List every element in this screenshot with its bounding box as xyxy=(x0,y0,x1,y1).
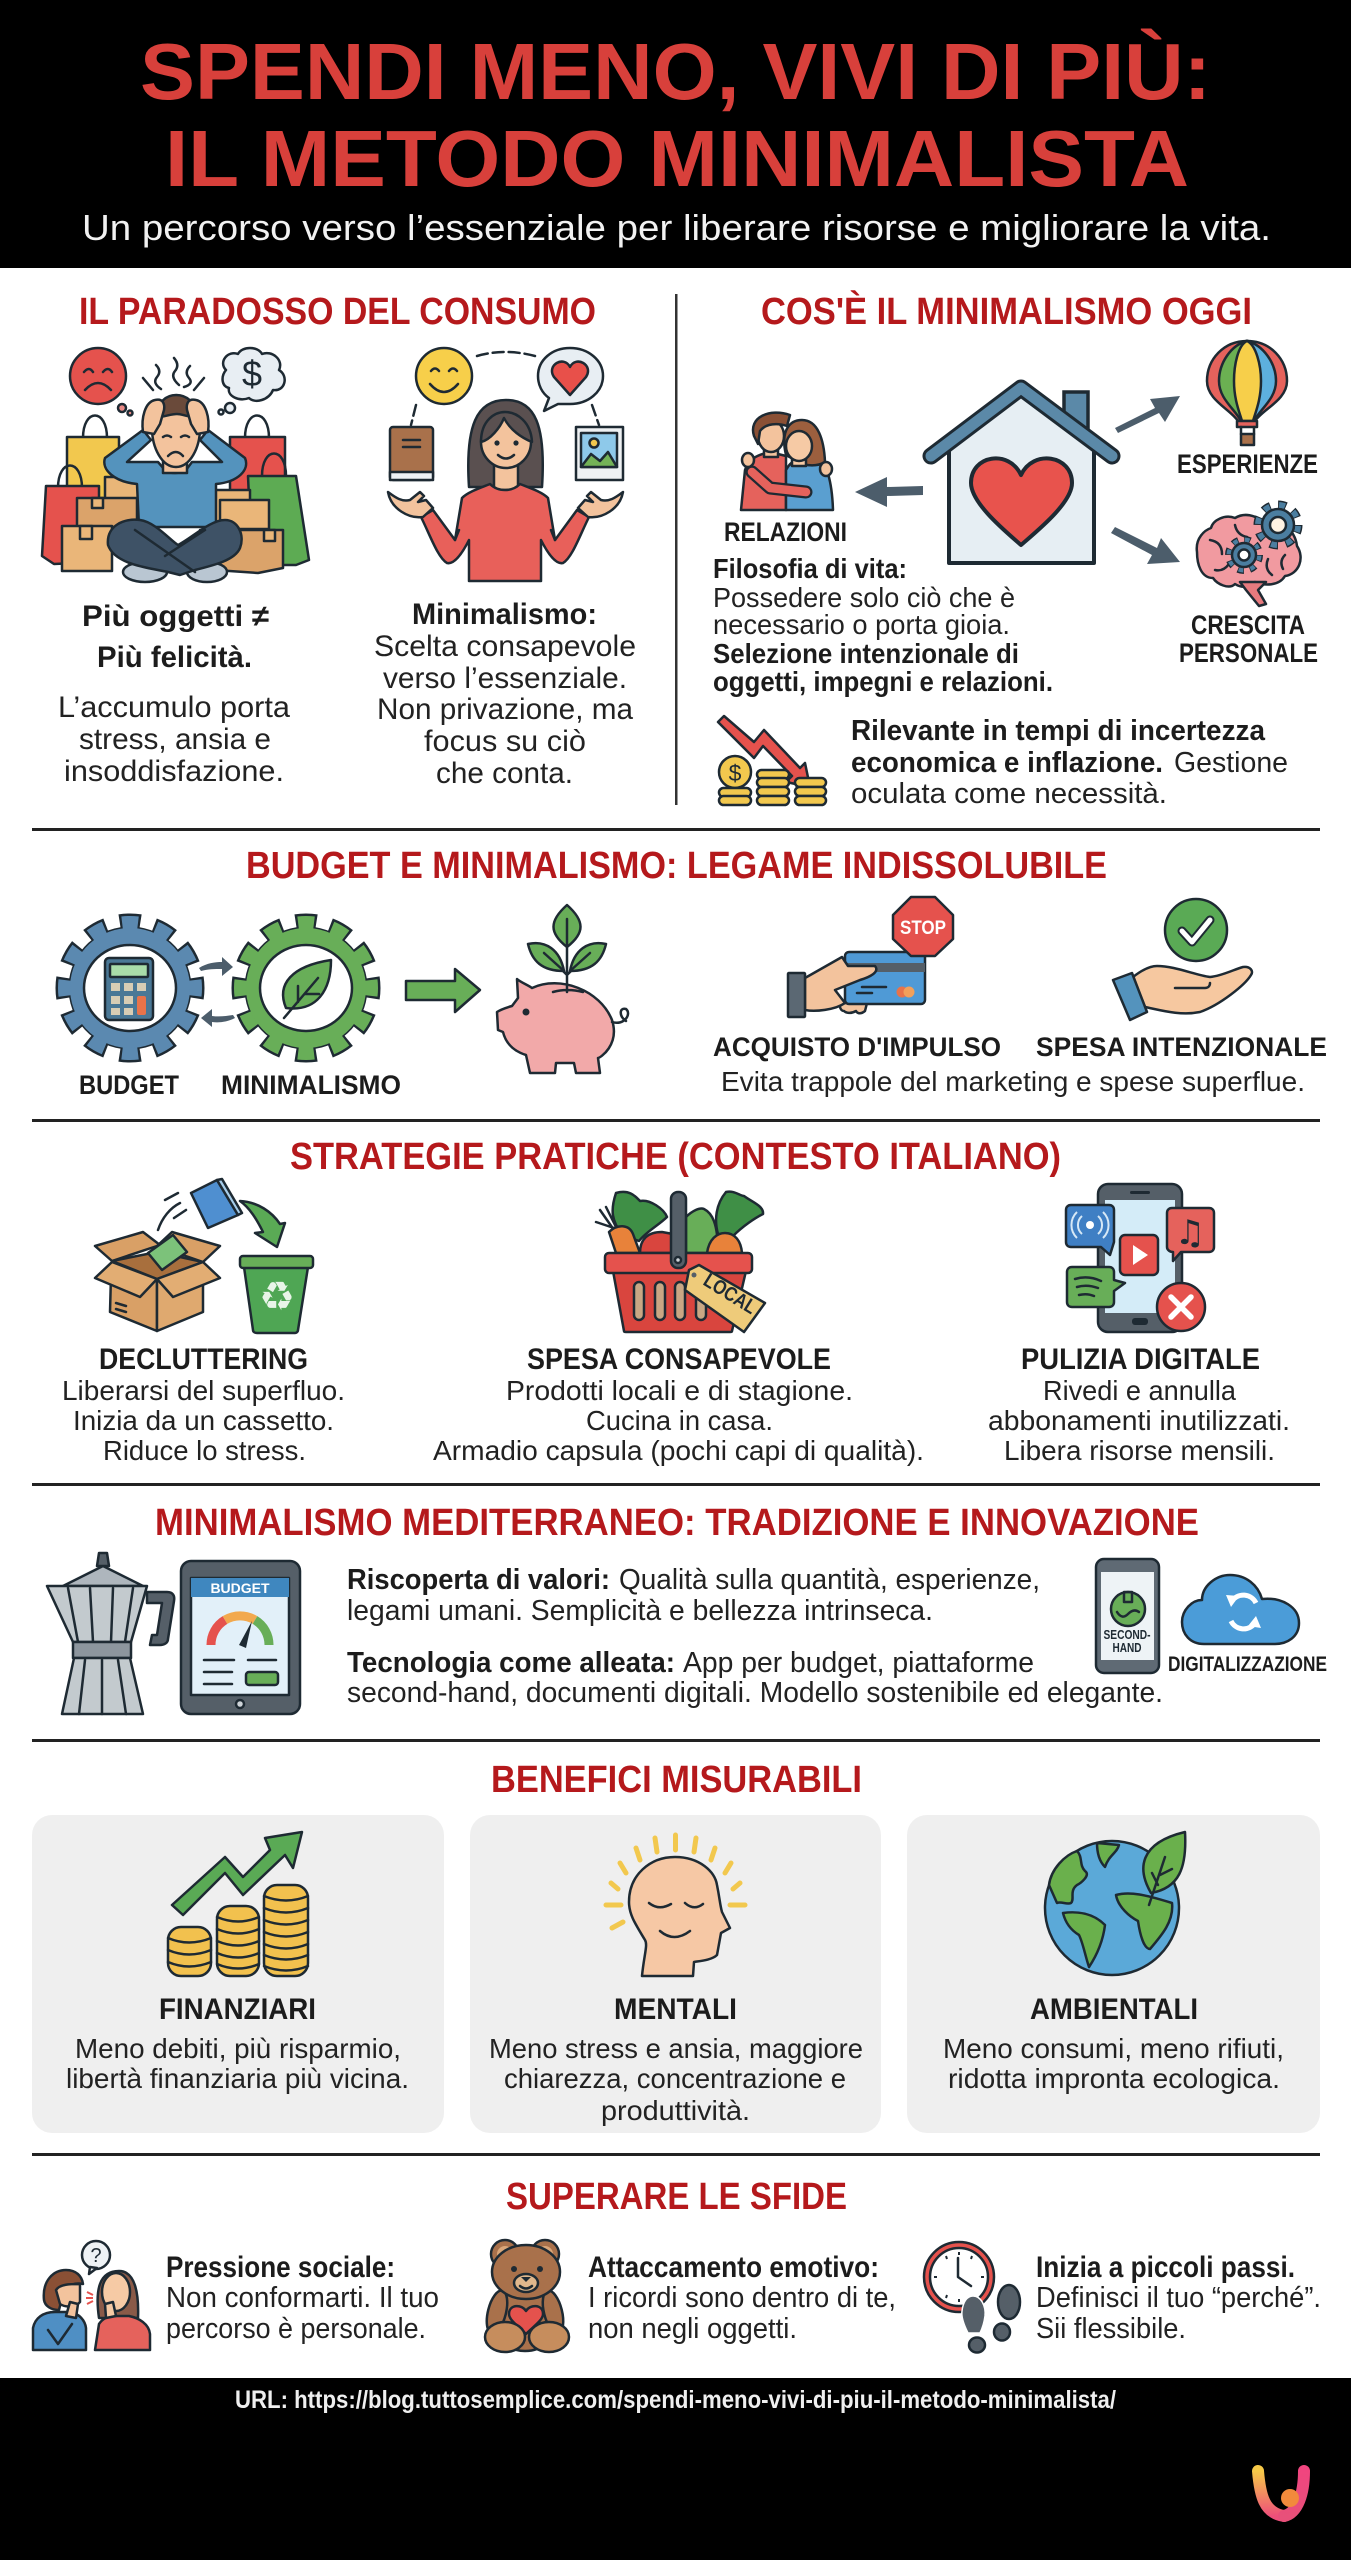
card: decluttering xyxy=(62,1343,345,1466)
icon: hand with card and stop sign xyxy=(788,897,953,1017)
text block: minimalismo: Scelta consapevole xyxy=(374,630,636,663)
text block: più oggetti xyxy=(58,600,290,788)
icon: second-hand phone xyxy=(1096,1559,1159,1673)
text block: attaccamento emotivo xyxy=(588,2251,896,2345)
icon: budget tablet xyxy=(181,1561,300,1714)
heading: minimalismo mediterraneo: MINIMALISMO MEDITERRANEO: TRADIZIONE E INNOVAZIONE xyxy=(155,1502,1199,1544)
card: spesa consapevole xyxy=(433,1343,924,1466)
text block: filosofia di vita: Selezione intenzionale di xyxy=(713,638,1019,669)
label: budget: BUDGET xyxy=(79,1070,179,1100)
icon: budget tablet: BUDGET xyxy=(210,1580,270,1596)
text: mentali description xyxy=(489,2033,863,2126)
text: mentali description: chiarezza, concentrazione e xyxy=(504,2063,846,2094)
text block: inizia a piccoli passi xyxy=(1036,2251,1321,2345)
panel: superare le sfide xyxy=(33,2176,1321,2352)
card: pulizia digitale: abbonamenti inutilizzati. xyxy=(988,1405,1290,1436)
text block: filosofia di vita: Possedere solo ciò che è xyxy=(713,582,1015,613)
text block: pressione sociale xyxy=(166,2251,439,2345)
card: pulizia digitale: Libera risorse mensili. xyxy=(1004,1435,1275,1466)
text: ambientali description: ridotta impronta ecologica. xyxy=(948,2063,1280,2094)
icon: exchange arrows between gears xyxy=(199,957,235,1027)
icon: globe with leaf xyxy=(1045,1832,1185,1975)
card: spesa consapevole: SPESA CONSAPEVOLE xyxy=(527,1343,831,1376)
heading: budget e minimalismo: BUDGET E MINIMALISMO: LEGAME INDISSOLUBILE xyxy=(246,845,1107,887)
icon: vegetable basket with local tag: LOCAL xyxy=(699,1270,760,1319)
icon: stressed man among shopping bags xyxy=(42,348,309,582)
icon: second-hand phone: HAND xyxy=(1112,1640,1142,1655)
label: crescita personale: PERSONALE xyxy=(1179,638,1318,668)
text block: più oggetti: stress, ansia e xyxy=(79,723,271,756)
text block: più oggetti: insoddisfazione. xyxy=(64,755,284,788)
label: crescita personale: CRESCITA xyxy=(1191,610,1305,640)
text block: inizia a piccoli passi: Inizia a piccoli passi. xyxy=(1036,2251,1295,2284)
footer band xyxy=(0,2378,1351,2560)
icon: stressed man among shopping bags: $ xyxy=(242,353,262,394)
text block: minimalismo: Minimalismo: xyxy=(412,598,597,631)
text block: pressione sociale: Pressione sociale: xyxy=(166,2251,395,2284)
card: spesa consapevole: Cucina in casa. xyxy=(586,1405,773,1436)
card: pulizia digitale: Rivedi e annulla xyxy=(1043,1375,1236,1406)
panel: benefici misurabili xyxy=(32,1759,1320,2133)
text block: tecnologia come alleata: second-hand, documenti digitali. Modello sostenibile ed elegante. xyxy=(347,1677,1163,1709)
label: finanziari: FINANZIARI xyxy=(159,1993,316,2026)
icon: calm head with rays xyxy=(606,1835,745,1976)
panel: strategie pratiche xyxy=(62,1136,1290,1466)
label: spesa intenzionale: SPESA INTENZIONALE xyxy=(1036,1032,1327,1062)
header band xyxy=(0,0,1351,268)
heading: superare le sfide: SUPERARE LE SFIDE xyxy=(506,2176,847,2218)
text: mentali description: produttività. xyxy=(601,2095,750,2126)
icon: piggy bank with plant xyxy=(497,905,628,1073)
card: decluttering: DECLUTTERING xyxy=(99,1343,308,1376)
text: ambientali description: Meno consumi, meno rifiuti, xyxy=(943,2033,1284,2064)
text block: rilevante in tempi di incertezza: Gestione xyxy=(1174,747,1288,779)
label: minimalismo: MINIMALISMO xyxy=(221,1070,401,1100)
text: mentali description: Meno stress e ansia, maggiore xyxy=(489,2033,863,2064)
text block: rilevante in tempi di incertezza: economica e inflazione. xyxy=(851,747,1163,779)
text block: filosofia di vita: necessario o porta gioia. xyxy=(713,609,1010,640)
heading: paradosso: IL PARADOSSO DEL CONSUMO xyxy=(79,291,596,333)
icon: green gear with leaf xyxy=(233,915,379,1061)
label: mentali: MENTALI xyxy=(614,1993,737,2026)
logo xyxy=(1258,2471,1304,2516)
icon: box, book and recycling bin: ♻ xyxy=(259,1274,295,1320)
card: pulizia digitale: PULIZIA DIGITALE xyxy=(1021,1343,1260,1376)
text block: pressione sociale: percorso è personale. xyxy=(166,2313,426,2345)
text block: minimalismo: verso l’essenziale. xyxy=(383,662,627,695)
arrow: budget to savings xyxy=(406,969,480,1012)
label: esperienze: ESPERIENZE xyxy=(1177,449,1318,479)
card: finanziari xyxy=(32,1815,444,2133)
icon: falling arrow and coins: $ xyxy=(729,760,742,786)
icon: rising arrow and coin stacks xyxy=(168,1832,308,1976)
text block: più oggetti: Più felicità. xyxy=(97,641,252,674)
text block: attaccamento emotivo: Attaccamento emotivo: xyxy=(588,2251,879,2284)
icon: vegetable basket with local tag xyxy=(596,1192,765,1332)
card: decluttering: Riduce lo stress. xyxy=(103,1435,306,1466)
card: ambientali xyxy=(907,1815,1320,2133)
label: relazioni: RELAZIONI xyxy=(724,517,847,547)
icon: brain with gears xyxy=(1197,505,1301,606)
text block: riscoperta di valori: legami umani. Semplicità e bellezza intrinseca. xyxy=(347,1595,933,1627)
text block: riscoperta di valori: Qualità sulla quantità, esperienze, xyxy=(619,1564,1040,1596)
icon: couple hugging xyxy=(741,413,833,510)
heading: benefici misurabili: BENEFICI MISURABILI xyxy=(491,1759,862,1801)
url: URL: https://blog.tuttosemplice.com/spendi-meno-vivi-di-piu-il-metodo-minimalista/ xyxy=(235,2386,1116,2414)
text: finanziari description: Meno debiti, più risparmio, xyxy=(75,2033,401,2064)
icon: smiling woman with balanced objects xyxy=(388,348,623,581)
icon: phone with subscription apps: ♫ xyxy=(1175,1213,1205,1253)
card: spesa consapevole: Prodotti locali e di stagione. xyxy=(506,1375,853,1406)
panel: minimalismo mediterraneo xyxy=(47,1502,1327,1714)
text block: minimalismo: che conta. xyxy=(436,757,573,790)
icon: blue gear with calculator xyxy=(57,915,203,1061)
icon: second-hand phone: SECOND- xyxy=(1104,1627,1150,1642)
icon: hot air balloon xyxy=(1207,341,1287,445)
icon: hand with card and stop sign: STOP xyxy=(900,918,946,939)
panel: cos'è il minimalismo oggi xyxy=(713,289,1318,810)
panel: budget e minimalismo xyxy=(57,845,1327,1100)
icon: falling arrow and coins xyxy=(718,716,826,805)
icon: moka pot xyxy=(47,1553,174,1714)
text: finanziari description: libertà finanziaria più vicina. xyxy=(66,2063,409,2094)
arrow to crescita xyxy=(1111,527,1180,564)
text block: minimalismo: focus su ciò xyxy=(424,725,586,758)
card: mentali xyxy=(470,1815,881,2133)
icon: box, book and recycling bin xyxy=(95,1179,313,1333)
text: finanziari description xyxy=(66,2033,409,2094)
text block: attaccamento emotivo: I ricordi sono dentro di te, xyxy=(588,2282,896,2314)
text block: minimalismo: Non privazione, ma xyxy=(377,693,633,726)
icon: whispering couple: ? xyxy=(90,2245,102,2267)
text block: filosofia di vita: oggetti, impegni e relazioni. xyxy=(713,666,1053,697)
text: evita trappole: Evita trappole del marketing e spese superflue. xyxy=(721,1066,1305,1097)
icon: teddy bear xyxy=(483,2240,569,2352)
icon: phone with subscription apps xyxy=(1066,1184,1214,1332)
title line 2: IL METODO MINIMALISTA xyxy=(165,114,1189,203)
text: ambientali description xyxy=(943,2033,1284,2094)
text block: riscoperta di valori xyxy=(347,1564,1040,1627)
label: acquisto d'impulso: ACQUISTO D'IMPULSO xyxy=(713,1032,1001,1062)
card: decluttering: Liberarsi del superfluo. xyxy=(62,1375,345,1406)
arrow to esperienze xyxy=(1115,396,1180,433)
text block: più oggetti: Più oggetti ≠ xyxy=(82,600,270,633)
label: crescita personale xyxy=(1179,610,1318,668)
text block: minimalismo xyxy=(374,598,636,790)
card: pulizia digitale xyxy=(988,1343,1290,1466)
subtitle: Un percorso verso l’essenziale per liberare risorse e migliorare la vita. xyxy=(82,207,1271,248)
text block: tecnologia come alleata: App per budget, piattaforme xyxy=(683,1647,1034,1679)
text block: più oggetti: L’accumulo porta xyxy=(58,691,290,724)
text block: attaccamento emotivo: non negli oggetti. xyxy=(588,2313,797,2345)
label: ambientali: AMBIENTALI xyxy=(1030,1993,1198,2026)
heading: strategie pratiche: STRATEGIE PRATICHE (CONTESTO ITALIANO) xyxy=(290,1136,1061,1178)
text block: pressione sociale: Non conformarti. Il tuo xyxy=(166,2282,439,2314)
heading: minimalismo oggi: COS'È IL MINIMALISMO OGGI xyxy=(761,289,1252,333)
card: decluttering: Inizia da un cassetto. xyxy=(73,1405,334,1436)
text block: rilevante in tempi di incertezza: oculata come necessità. xyxy=(851,778,1167,810)
text block: inizia a piccoli passi: Definisci il tuo “perché”. xyxy=(1036,2282,1321,2314)
text block: tecnologia come alleata: Tecnologia come alleata: xyxy=(347,1647,675,1679)
text block: rilevante in tempi di incertezza xyxy=(851,715,1288,810)
icon: sync cloud xyxy=(1182,1575,1299,1644)
title line 1: SPENDI MENO, VIVI DI PIÙ: xyxy=(140,27,1211,116)
text block: filosofia di vita xyxy=(713,553,1053,697)
text block: tecnologia come alleata xyxy=(347,1647,1163,1709)
icon: whispering couple xyxy=(33,2241,150,2350)
text block: filosofia di vita: Filosofia di vita: xyxy=(713,553,907,584)
text block: riscoperta di valori: Riscoperta di valori: xyxy=(347,1564,610,1596)
text block: rilevante in tempi di incertezza: Rilevante in tempi di incertezza xyxy=(851,715,1266,747)
icon: clock and footsteps xyxy=(924,2242,1020,2352)
icon: open hand with check xyxy=(1113,899,1252,1020)
text block: inizia a piccoli passi: Sii flessibile. xyxy=(1036,2313,1186,2345)
icon: house with heart xyxy=(931,388,1112,563)
panel: il paradosso del consumo xyxy=(42,291,636,790)
card: spesa consapevole: Armadio capsula (pochi capi di qualità). xyxy=(433,1435,924,1466)
arrow to relazioni xyxy=(855,477,923,507)
